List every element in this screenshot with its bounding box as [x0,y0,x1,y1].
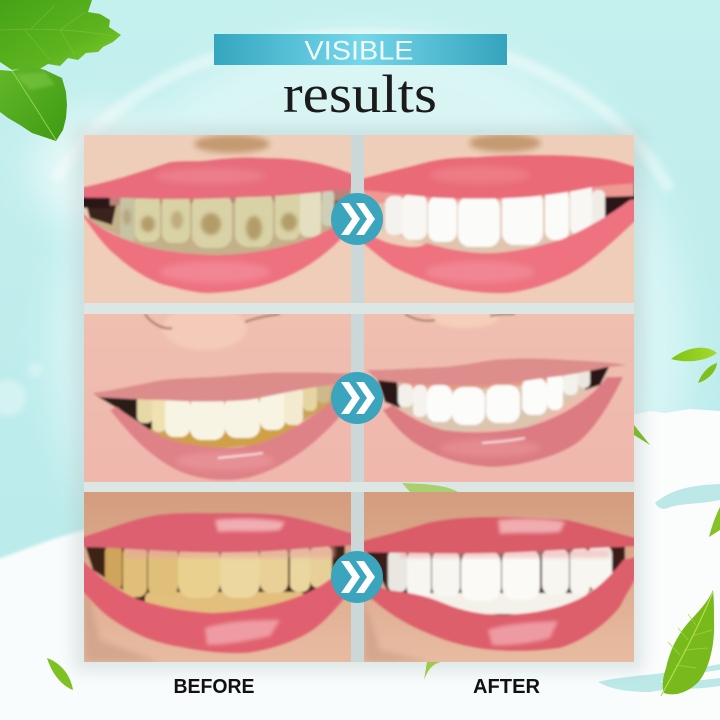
white brush landscape [0,409,720,720]
icon: mint leaves top left [0,0,121,141]
decorative leaves peeking between panels [402,425,650,680]
panel: row 3 after [364,492,634,662]
banner text: VISIBLE [304,36,414,66]
icon: bottom right leaf [661,590,714,696]
icon: bottom left leaf [47,658,73,690]
panel shadows [74,127,644,671]
panel: row 3 before [84,492,351,662]
title banner [214,34,507,66]
arrow: row 2 [331,372,383,424]
label: after: AFTER [473,676,541,698]
panel: row 2 before [84,314,351,482]
arrow: row 1 [331,193,383,245]
arrow: row 3 [331,551,383,603]
title: results: results [283,64,437,124]
label: before: BEFORE [174,676,254,698]
panel: row 1 before [84,135,351,303]
icon: small leaves right [671,348,720,537]
panel: row 1 after [364,135,634,303]
panel: row 2 after [364,314,634,482]
